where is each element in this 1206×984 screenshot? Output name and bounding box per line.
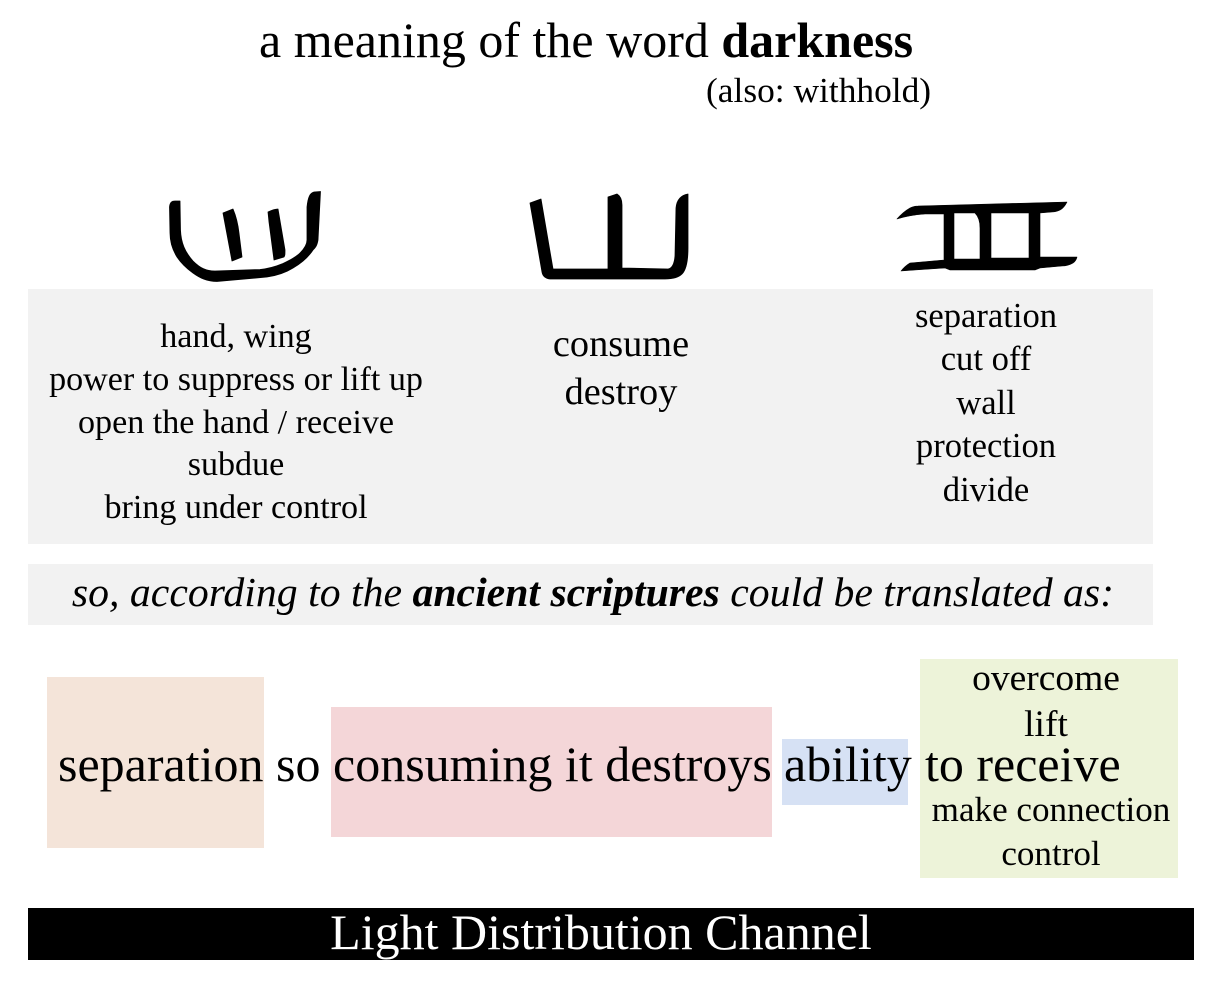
- option: overcome: overcome: [972, 658, 1120, 699]
- word: separation: separation: [58, 736, 263, 792]
- text block: hand meanings: open the hand / receive: [78, 404, 394, 440]
- option: make connection: make connection: [932, 790, 1170, 829]
- text block: hand meanings: bring under control: [104, 489, 368, 526]
- text block: separation meanings: divide: [943, 470, 1029, 508]
- word: so: so: [276, 736, 320, 792]
- text block: separation meanings: separation: [915, 296, 1057, 334]
- highlight: consuming it destroys: [331, 707, 772, 837]
- icon: fence glyph: [896, 202, 1078, 272]
- word: to receive: to receive: [925, 736, 1121, 792]
- banner text: so, according to the ancient scriptures could be translated as:: [72, 570, 1114, 616]
- word: ability: ability: [784, 736, 912, 792]
- text block: separation meanings: protection: [916, 427, 1056, 465]
- text block: hand meanings: subdue: [188, 446, 284, 483]
- text block: hand meanings: hand, wing: [160, 318, 312, 355]
- word: consuming it destroys: consuming it destroys: [333, 736, 772, 792]
- text block: consume meanings: consume: [553, 323, 689, 365]
- option: lift: lift: [1024, 704, 1068, 745]
- text block: separation meanings: cut off: [941, 340, 1031, 378]
- text block: consume meanings: destroy: [565, 371, 677, 413]
- panel: glyph meanings: [28, 289, 1153, 544]
- highlight: separation: [47, 677, 264, 848]
- subtitle: (also: withhold): [706, 70, 931, 110]
- option: control: control: [1001, 834, 1101, 873]
- footer text: Light Distribution Channel: [330, 904, 872, 960]
- banner: translation intro: [28, 564, 1153, 625]
- highlight: to receive options: [920, 659, 1178, 878]
- text block: hand meanings: power to suppress or lift up: [49, 361, 423, 398]
- icon: hand glyph: [169, 191, 321, 282]
- highlight: ability: [782, 739, 908, 805]
- text block: consume meanings: [553, 323, 689, 413]
- text block: separation meanings: wall: [956, 384, 1016, 422]
- text block: separation meanings: [915, 296, 1057, 508]
- icon: open mouth glyph: [530, 194, 688, 280]
- footer bar: [28, 908, 1194, 960]
- text block: hand meanings: [49, 318, 423, 526]
- title: a meaning of the word darkness: [259, 12, 913, 68]
